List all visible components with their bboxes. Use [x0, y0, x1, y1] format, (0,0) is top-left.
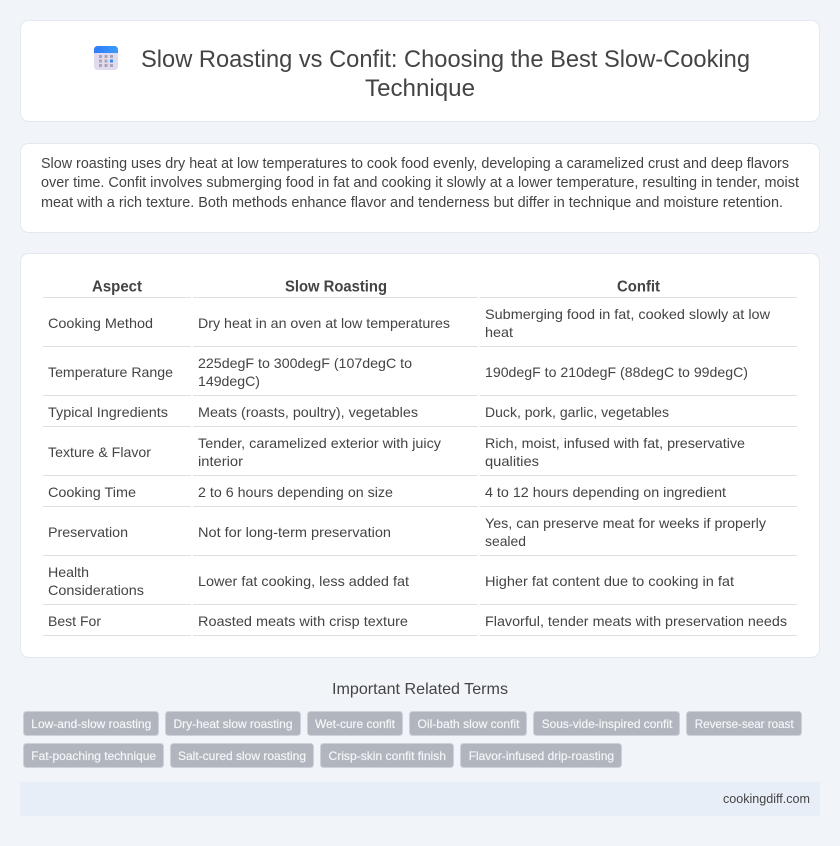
table header row: Aspect: [92, 278, 143, 296]
panel: introduction text: meat with a rich texture. Both methods enhance flavor and tenderness but differ in technique and moisture retention.: [41, 195, 783, 211]
footer: [20, 782, 820, 816]
panel: introduction text: over time. Confit involves submerging food in fat and cooking it slowly at a lower temperature, resulting in tender, moist: [41, 175, 799, 191]
row: texture and flavor: Texture & Flavor: [48, 444, 151, 460]
tag: [24, 744, 164, 768]
tag: [460, 744, 622, 768]
row: preservation: Preservation: [48, 524, 128, 540]
tag: Reverse-sear roast: [695, 717, 794, 731]
heading: important related terms: Important Related Terms: [332, 681, 508, 698]
tag: Flavor-infused drip-roasting: [469, 749, 614, 763]
row: best for: Roasted meats with crisp texture: [198, 613, 408, 629]
icon: calendar: [94, 46, 118, 70]
tag: [170, 744, 314, 768]
row: best for: Flavorful, tender meats with preservation needs: [485, 613, 787, 629]
row: temperature range: 149degC): [198, 373, 260, 389]
row: cooking time: Cooking Time: [48, 484, 136, 500]
row: cooking method: Submerging food in fat, cooked slowly at low: [485, 306, 771, 322]
tag: Salt-cured slow roasting: [178, 749, 306, 763]
row: health considerations: Health: [48, 564, 89, 580]
tag: [308, 712, 402, 736]
tag: Oil-bath slow confit: [418, 717, 520, 731]
tag: Low-and-slow roasting: [31, 717, 151, 731]
row: health considerations: Higher fat content due to cooking in fat: [485, 573, 734, 589]
row: texture and flavor: Tender, caramelized exterior with juicy: [198, 435, 441, 451]
panel: related term tags: [24, 712, 802, 768]
tag: [24, 712, 158, 736]
row: texture and flavor: Rich, moist, infused with fat, preservative: [485, 435, 745, 451]
row: temperature range: Temperature Range: [48, 364, 173, 380]
title: Slow Roasting vs Confit: Choosing the Best Slow-Cooking: [141, 46, 750, 73]
tag: Crisp-skin confit finish: [328, 749, 446, 763]
tag: Dry-heat slow roasting: [174, 717, 292, 731]
tag: Sous-vide-inspired confit: [542, 717, 673, 731]
row: preservation: sealed: [485, 533, 526, 549]
row: health considerations: Lower fat cooking, less added fat: [198, 573, 409, 589]
row: preservation: Yes, can preserve meat for weeks if properly: [485, 515, 766, 531]
row: cooking method: [43, 306, 797, 347]
table header row: Slow Roasting: [285, 278, 387, 296]
panel: header: [20, 20, 820, 122]
tag: [534, 712, 680, 736]
row: typical ingredients: Meats (roasts, poultry), vegetables: [198, 404, 418, 420]
row: typical ingredients: Duck, pork, garlic, vegetables: [485, 404, 669, 420]
tag: Wet-cure confit: [315, 717, 396, 731]
row: texture and flavor: interior: [198, 453, 243, 469]
row: best for: [43, 613, 797, 636]
row: health considerations: Considerations: [48, 582, 144, 598]
row: best for: Best For: [48, 613, 101, 629]
row: texture and flavor: [43, 435, 797, 476]
row: preservation: Not for long-term preservation: [198, 524, 391, 540]
row: temperature range: [43, 355, 797, 396]
footer: cookingdiff.com: [723, 791, 810, 806]
tag: [410, 712, 526, 736]
tag: Fat-poaching technique: [31, 749, 156, 763]
row: cooking time: 4 to 12 hours depending on ingredient: [485, 484, 726, 500]
tag: [320, 744, 454, 768]
row: preservation: [43, 515, 797, 556]
row: cooking method: Cooking Method: [48, 315, 153, 331]
panel: comparison table: [20, 254, 820, 658]
tag: [166, 712, 300, 736]
row: temperature range: 190degF to 210degF (88degC to 99degC): [485, 364, 748, 380]
row: cooking time: 2 to 6 hours depending on size: [198, 484, 393, 500]
panel: introduction text: Slow roasting uses dry heat at low temperatures to cook food evenly, developing a caramelized crust and deep flavors: [41, 156, 789, 172]
row: texture and flavor: qualities: [485, 453, 539, 469]
row: typical ingredients: Typical Ingredients: [48, 404, 168, 420]
row: typical ingredients: [43, 404, 797, 427]
row: health considerations: [43, 564, 797, 605]
row: cooking method: Dry heat in an oven at low temperatures: [198, 315, 450, 331]
table header row: [43, 278, 797, 298]
table header row: Confit: [617, 278, 661, 296]
row: cooking method: heat: [485, 324, 513, 340]
row: cooking time: [43, 484, 797, 507]
tag: [686, 712, 802, 736]
title: [141, 46, 750, 102]
panel: introduction text: [20, 144, 820, 232]
row: temperature range: 225degF to 300degF (107degC to: [198, 355, 412, 371]
title: Technique: [365, 75, 475, 102]
